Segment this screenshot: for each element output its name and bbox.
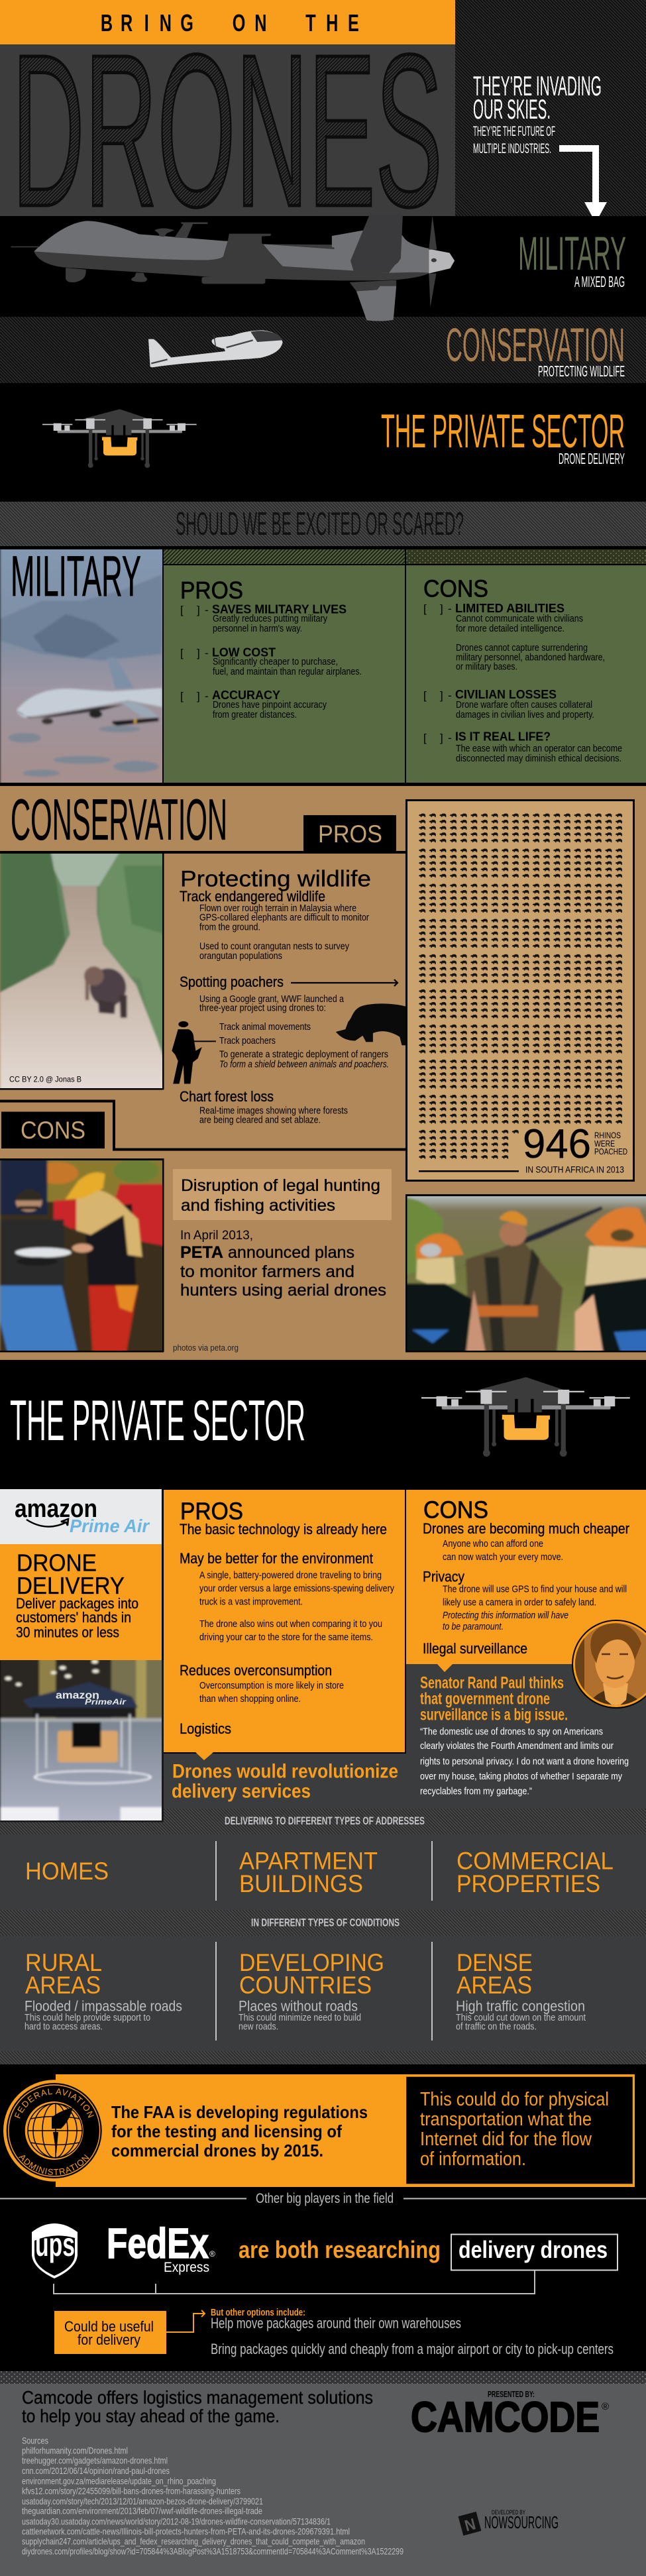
panel: military section [0,539,646,787]
panel: military pros: PROS [180,577,243,604]
panel: faa regulations [3,2074,635,2187]
stat: 946 rhinos poached: POACHED [594,1147,627,1156]
arrow: white elbow [559,145,607,223]
condition: rural areas: RURAL [25,1949,102,1976]
panel: private sector cons [406,1490,646,1672]
con: limited abilities: Cannot communicate with civilians [456,613,583,624]
photo: elephant on forest road [0,846,165,1094]
panel: private sector section [0,1360,646,2064]
address type: commercial properties [457,1848,614,1897]
con: is it real life: [ ] - [423,732,452,744]
condition: dense areas: of traffic on the roads. [456,2021,537,2033]
logo: camcode: CAMCODE [411,2393,600,2441]
logo: fedex express: ® [209,2249,215,2259]
panel: private sector pros: Logistics [180,1720,231,1737]
text block: other options: But other options include: [211,2307,305,2318]
logo: nowsourcing: DEVELOPED BY [492,2509,525,2516]
sources list: diydrones.com/profiles/blog/show?id=705844%3ABlogPost%3A1518753&commentId=705844%3AComment%3A1522299 [22,2546,404,2557]
text block: faa developing regulations: The FAA is developing regulations [111,2102,368,2122]
text block: spotting poachers: Using a Google grant, WWF launched a [199,993,345,1005]
logo: fedex express: Express [164,2260,209,2275]
condition: developing countries: COUNTRIES [239,1972,372,1999]
icon: small fixed-wing drone [148,330,283,367]
panel: private sector cons: Privacy [423,1569,464,1585]
text: camcode offer: to help you stay ahead of the game. [22,2406,280,2426]
arrow: to other options [166,2310,205,2332]
callout: drones would revolutionize [172,1761,398,1803]
panel: conservation teaser [0,317,646,383]
panel: private sector section: THE PRIVATE SECTOR [10,1389,305,1453]
panel: private sector teaser [0,383,646,502]
condition: dense areas: DENSE [457,1949,533,1976]
con: limited abilities [423,602,605,673]
chart: 946 rhino icons [419,813,625,1161]
callout: disruption of hunting [173,1169,392,1220]
address type: apartment buildings: BUILDINGS [239,1870,363,1897]
address type: commercial properties: COMMERCIAL [457,1848,614,1875]
heading: military: MILITARY [11,545,141,608]
condition: rural areas: hard to access areas. [25,2021,103,2033]
callout: drones would revolutionize: delivery services [172,1781,311,1803]
logo: amazon prime air: amazon [15,1495,97,1523]
sources list: Sources [22,2436,48,2446]
sources list: usatoday.com/story/tech/2013/12/01/amazon-bezos-drone-delivery/3799021 [22,2496,263,2506]
text block: drone delivery [0,1544,162,1660]
text block: drone delivery: customers' hands in [16,1609,131,1626]
photo label: amazon prime air on drone [56,1690,127,1707]
pro: low cost: Significantly cheaper to purchase, [213,656,338,667]
con: limited abilities: Drones cannot capture surrendering [456,642,588,653]
text block: spotting poachers: Spotting poachers [180,974,284,990]
title banner: bring on the: BRING ON THE [101,10,359,36]
logo: fedex express: FedEx [107,2219,209,2267]
logo: amazon prime air: Prime Air [70,1516,150,1536]
logo: camcode: PRESENTED BY: [488,2389,535,2399]
panel: private sector cons: CONS [423,1496,488,1524]
pro: accuracy: from greater distances. [213,709,297,720]
con: is it real life: IS IT REAL LIFE? [455,730,551,744]
text block: protecting wildlife: Protecting wildlife [180,867,371,892]
condition: developing countries: new roads. [239,2021,278,2033]
stat: 946 rhinos poached: RHINOS [594,1131,621,1141]
text block: faa developing regulations: commercial drones by 2015. [111,2141,323,2160]
con: civilian losses: Drone warfare often causes collateral [456,699,592,710]
text block: spotting poachers: three-year project using drones to: [199,1003,326,1014]
band: in different types of conditions [0,1910,646,1936]
condition: developing countries: DEVELOPING [239,1949,384,1976]
sources list: philforhumanity.com/Drones.html [22,2445,128,2456]
quote: rand paul: “The domestic use of drones to spy on Americans [420,1726,603,1738]
text block: PETA plans: to monitor farmers and [180,1262,354,1281]
text block: protecting wildlife: orangutan populations [199,950,282,962]
panel: private sector pros: PROS [180,1498,243,1525]
caption: photo credit: CC BY 2.0 @ Jonas B [9,1075,81,1084]
logo: amazon prime air [0,1489,162,1544]
logo: federal aviation administration seal: ADMINISTRATION [19,2154,89,2175]
header dots cons [406,549,646,564]
condition: rural areas: Flooded / impassable roads [25,1997,182,2014]
condition: dense areas: This could cut down on the amount [456,2012,586,2023]
sources list: theguardian.com/environment/2013/feb/07/wwf-wildlife-drones-illegal-trade [22,2506,262,2516]
logo: nowsourcing: N [462,2515,478,2536]
pro: saves military lives: [ ] - [180,604,209,616]
logo: federal aviation administration seal [3,2080,102,2182]
cons tab with rule [0,1101,405,1149]
con: is it real life [423,730,622,764]
panel: military cons: CONS [423,575,488,602]
text block: spotting poachers: To generate a strategic deployment of rangers [219,1049,388,1060]
callout: internet for physical transport: transportation what the [420,2109,592,2130]
stat: 946 rhinos poached [419,1121,627,1175]
pro: accuracy: [ ] - [180,690,209,702]
text block: drone delivery: DRONE [17,1549,97,1577]
sources list: cattlenetwork.com/cattle-news/Illinois-bill-protects-hunters-from-PETA-and-its-drones-209679391.html [22,2526,350,2537]
sources list: treehugger.com/gadgets/amazon-drones.html [22,2455,168,2466]
text block: protecting wildlife: Track endangered wildlife [180,888,325,905]
panel: private sector pros: Reduces overconsumption [180,1662,332,1679]
title banner: bring on the [0,0,455,44]
text block: other options [211,2307,614,2357]
sources list: cnn.com/2012/06/14/opinion/rand-paul-drones [22,2465,170,2476]
icon: delivery quadcopter [421,1377,630,1457]
photo: military drone over mountains [0,539,165,787]
text block: spotting poachers: Track animal movements [219,1021,311,1033]
text block: drone delivery: DELIVERY [17,1572,125,1599]
callout: could be useful for delivery: for delivery [78,2331,140,2348]
callout: senator rand paul: surveillance is a big issue. [420,1706,568,1724]
callout: could be useful for delivery [54,2311,166,2354]
cons tab with rule: CONS [21,1117,85,1144]
callout: disruption of hunting: Disruption of legal hunting [181,1176,380,1195]
condition: rural areas: AREAS [25,1972,101,1999]
text block: protecting wildlife: from the ground. [199,921,260,933]
icon: rhino silhouette [336,1003,406,1045]
condition: developing countries: This could minimize need to build [239,2012,361,2023]
quote: rand paul [420,1726,629,1797]
intro text: THEY’RE THE FUTURE OF [473,124,555,139]
caption: photos via peta: photos via peta.org [173,1343,239,1353]
con: civilian losses: [ ] - [423,689,452,702]
panel: private sector cons: Anyone who can afford one [443,1538,543,1549]
text block: protecting wildlife: Used to count orangutan nests to survey [199,941,349,952]
condition: rural areas: This could help provide support to [25,2012,150,2023]
pro: saves military lives: SAVES MILITARY LIVES [212,603,347,616]
text block: PETA plans: hunters using aerial drones [180,1281,386,1300]
band: delivering to different types of addresses [0,1809,646,1834]
callout: internet for physical transport: Internet did for the flow [420,2129,592,2150]
pros tab: PROS [318,820,382,848]
bracket connector [54,2270,535,2294]
condition: dense areas: AREAS [457,1972,532,1999]
header stripe pros [164,549,405,564]
pro: saves military lives: Greatly reduces putting military [213,613,327,624]
panel: private sector pros: The drone also wins out when comparing it to you [199,1618,382,1630]
panel: private sector cons: to be paramount. [443,1621,504,1632]
panel: private sector cons: likely use a camera in order to safely land. [443,1597,596,1608]
text block: chart forest loss: are being cleared and set ablaze. [199,1115,321,1126]
condition: dense areas [456,1949,586,2033]
con: civilian losses: CIVILIAN LOSSES [455,688,557,701]
panel: private sector pros: The basic technology is already here [180,1521,387,1538]
logo: ups: ups [35,2226,75,2263]
stat: 946 rhinos poached: WERE [594,1139,615,1148]
con: civilian losses [423,688,594,720]
title panel: drones [0,10,455,252]
text block: PETA plans: PETA announced plans [180,1243,354,1262]
divider heading: other big players: Other big players in the field [256,2191,394,2206]
callout: senator rand paul: that government drone [420,1690,550,1708]
address type: commercial properties: PROPERTIES [457,1870,600,1897]
text block: spotting poachers [180,974,398,1070]
quote: rand paul: clearly violates the Fourth Amendment and limits our [420,1740,614,1752]
panel: private sector pros: your order versus a large emissions-spewing delivery [199,1583,394,1595]
callout: delivery drones: delivery drones [458,2236,608,2263]
panel: other big players [0,2191,646,2357]
panel: private sector pros: Overconsumption is more likely in store [199,1680,344,1691]
panel: conservation section [0,786,646,1360]
text block: protecting wildlife: Flown over rough terrain in Malaysia where [199,903,356,914]
callout: could be useful for delivery: Could be useful [64,2318,154,2335]
address type: apartment buildings [239,1848,378,1897]
text block: PETA plans: In April 2013, [180,1229,253,1243]
panel: conditions [0,1936,646,2051]
band: stripe divider [0,2051,646,2064]
logo: federal aviation administration seal: FEDERAL AVIATION [15,2088,94,2119]
callout: drones would revolutionize: Drones would revolutionize [172,1761,398,1783]
stat: 946 rhinos poached: 946 [523,1121,591,1167]
panel: should we be excited or scared [0,502,646,546]
condition: developing countries: Places without roads [239,1997,358,2014]
stat: 946 rhinos poached: IN SOUTH AFRICA IN 2013 [525,1164,624,1175]
photo: amazon prime air drone [0,1657,165,1825]
callout: internet for physical transport: of information. [420,2149,526,2170]
arrow: to rhino panel [291,980,398,986]
logo: ups [32,2223,78,2278]
sources list: usatoday30.usatoday.com/news/world/story/2012-08-19/drones-wildfire-conservation/57134836/1 [22,2516,331,2527]
text block: chart forest loss: Chart forest loss [180,1088,274,1105]
panel: private sector cons: Illegal surveillance [423,1640,527,1657]
icon: poacher silhouette [172,1021,216,1084]
icon: delivery quadcopter [42,409,197,468]
callout: internet for physical transport: This could do for physical [420,2089,609,2110]
panel: private sector pros [164,1490,405,1760]
intro text: OUR SKIES. [473,93,551,125]
condition: dense areas: High traffic congestion [456,1997,585,2014]
pro: low cost: [ ] - [180,647,209,659]
pro: accuracy: Drones have pinpoint accuracy [213,699,327,710]
con: limited abilities: military personnel, abandoned hardware, [456,652,605,663]
panel: military teaser [0,216,646,317]
pros tab [303,815,396,852]
text block: drone delivery: Deliver packages into [16,1595,138,1612]
panel: private sector cons: Protecting this information will have [443,1610,568,1621]
con: civilian losses: damages in civilian lives and property. [456,709,594,720]
pro: low cost [180,646,362,677]
portrait: senator rand paul [570,1617,646,1713]
illustration: predator drone [11,214,455,321]
text: camcode offer [22,2387,373,2426]
callout: senator rand paul [420,1674,568,1724]
callout: delivery drones [451,2235,618,2270]
intro text: MULTIPLE INDUSTRIES. [473,141,551,156]
text: camcode offer: Camcode offers logistics management solutions [22,2387,373,2408]
panel: private sector pros: A single, battery-powered drone traveling to bring [199,1570,382,1581]
panel: address types [0,1834,646,1910]
text block: protecting wildlife [180,867,371,962]
panel: private sector pros: May be better for the environment [180,1550,373,1567]
con: limited abilities: or military bases. [456,661,517,673]
panel: military pros [164,565,405,783]
panel: header [0,0,646,252]
sources list: kfvs12.com/story/22455099/bill-bans-drones-from-harassing-hunters [22,2486,241,2496]
sources list: environment.gov.za/mediarelease/update_on_rhino_poaching [22,2476,216,2487]
con: limited abilities: LIMITED ABILITIES [455,602,565,615]
panel: dark gray callouts [164,1664,646,1809]
text block: spotting poachers: Track poachers [219,1035,276,1046]
pro: accuracy [180,689,327,720]
text block: spotting poachers: To form a shield between animals and poachers. [219,1059,389,1070]
address type: apartment buildings: APARTMENT [239,1848,378,1875]
condition: rural areas [25,1949,182,2033]
pro: accuracy: ACCURACY [212,689,280,702]
text block: chart forest loss [180,1088,348,1126]
callout: internet for physical transport [405,2076,633,2184]
con: limited abilities: [ ] - [423,602,452,615]
text block: chart forest loss: Real-time images showing where forests [199,1105,348,1117]
condition: developing countries [239,1949,384,2033]
panel: private sector pros: than when shopping online. [199,1693,301,1705]
photo label: amazon prime air on drone: amazon [56,1690,99,1701]
band: in different types of conditions: IN DIFFERENT TYPES OF CONDITIONS [251,1917,400,1929]
quote: rand paul: recyclables from my garbage.” [420,1786,532,1797]
logo: nowsourcing [458,2509,559,2536]
pro: saves military lives [180,603,347,634]
panel: footer [0,2371,646,2576]
text block: other options: Help move packages around their own warehouses [211,2315,461,2331]
address type: homes: HOMES [25,1858,109,1885]
logo: camcode: ® [602,2401,609,2412]
callout: senator rand paul: Senator Rand Paul thinks [420,1674,564,1693]
text: are both researching: are both researching [239,2236,441,2263]
text block: PETA plans [180,1229,386,1300]
con: limited abilities: for more detailed intelligence. [456,623,565,634]
panel: military cons [406,565,646,783]
panel: private sector pros: truck is a vast improvement. [199,1596,303,1608]
panel: private sector cons: can now watch your every move. [443,1551,563,1563]
band: delivering to different types of addresses: DELIVERING TO DIFFERENT TYPES OF ADDRESSES [225,1815,425,1827]
pro: low cost: fuel, and maintain than regular airplanes. [213,666,362,677]
text block: protecting wildlife: GPS-collared elephants are difficult to monitor [199,912,369,923]
photo: hunters [400,1191,646,1357]
sources list [22,2436,404,2557]
photo label: amazon prime air on drone: PrimeAir [85,1697,127,1707]
callout: disruption of hunting: and fishing activities [181,1196,335,1215]
panel: rhino pictogram [407,801,633,1181]
pro: saves military lives: personnel in harm's way. [213,623,302,634]
text block: drone delivery: 30 minutes or less [16,1624,119,1641]
panel: conservation section: CONSERVATION [11,787,227,852]
photo: drone operators [0,1153,165,1357]
text block: faa developing regulations: for the testing and licensing of [111,2121,342,2141]
pro: low cost: LOW COST [212,646,276,659]
intro text [473,70,602,156]
logo: nowsourcing: NOWSOURCING [484,2512,559,2532]
panel: private sector pros: driving your car to the store for the same items. [199,1632,373,1643]
text block: faa developing regulations [111,2102,368,2160]
sources list: supplychain247.com/article/ups_and_fedex_researching_delivery_drones_that_could_compete_with_amazon [22,2536,365,2547]
